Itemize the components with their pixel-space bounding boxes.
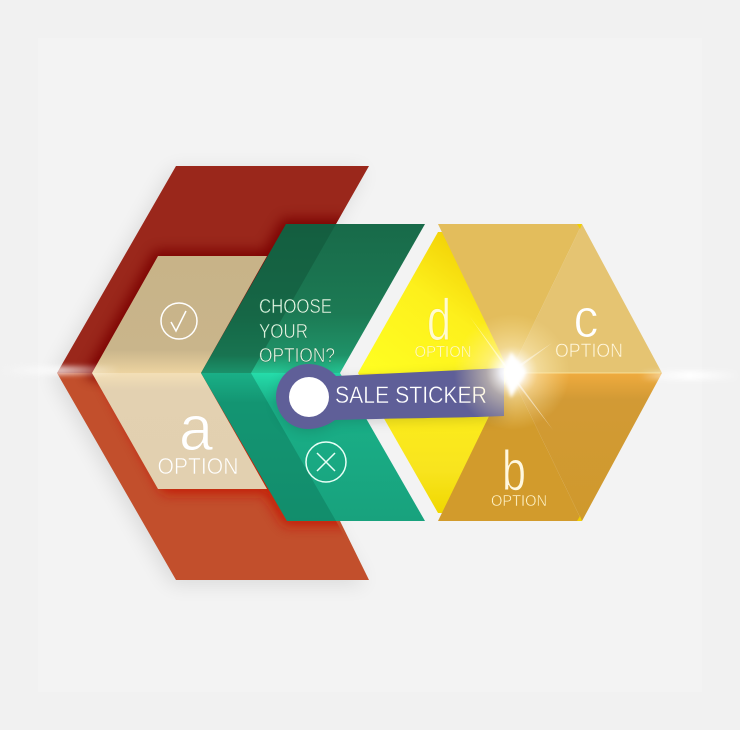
horizontal light streak	[0, 366, 740, 380]
letter a: a	[179, 392, 213, 464]
lens flare	[454, 314, 570, 430]
overlap shade	[201, 224, 336, 373]
triangle: option d yellow	[358, 232, 512, 513]
triangle: option c: OPTION	[555, 341, 623, 362]
heading: choose your option: OPTION?	[259, 345, 335, 367]
icon: cross circle	[306, 442, 346, 482]
triangle: option b: b	[502, 439, 526, 503]
triangle: option d yellow: d	[427, 288, 451, 353]
heading: choose your option: CHOOSE	[259, 296, 332, 318]
triangle: option d yellow: OPTION	[414, 344, 472, 361]
label: option a: OPTION	[158, 453, 238, 479]
sticker text: SALE STICKER	[335, 382, 487, 409]
triangle: top gold	[438, 224, 582, 373]
lower shadow	[104, 373, 345, 521]
panel: red chevron	[53, 166, 369, 584]
triangle: option b	[438, 373, 582, 521]
triangle: option c	[510, 224, 662, 373]
icon: check mark circle	[161, 303, 197, 339]
triangle: option b: OPTION	[491, 493, 547, 510]
upper shadow	[92, 224, 345, 373]
panel: hexagon options	[358, 224, 662, 521]
heading: choose your option	[259, 296, 335, 367]
heading: choose your option: YOUR	[259, 321, 308, 343]
triangle: right gold	[510, 373, 662, 521]
panel: green choose your option	[201, 224, 425, 521]
sticker circle	[289, 377, 329, 417]
sale sticker	[276, 364, 504, 432]
triangle: option c: c	[574, 287, 598, 349]
panel: beige option a	[92, 256, 267, 489]
